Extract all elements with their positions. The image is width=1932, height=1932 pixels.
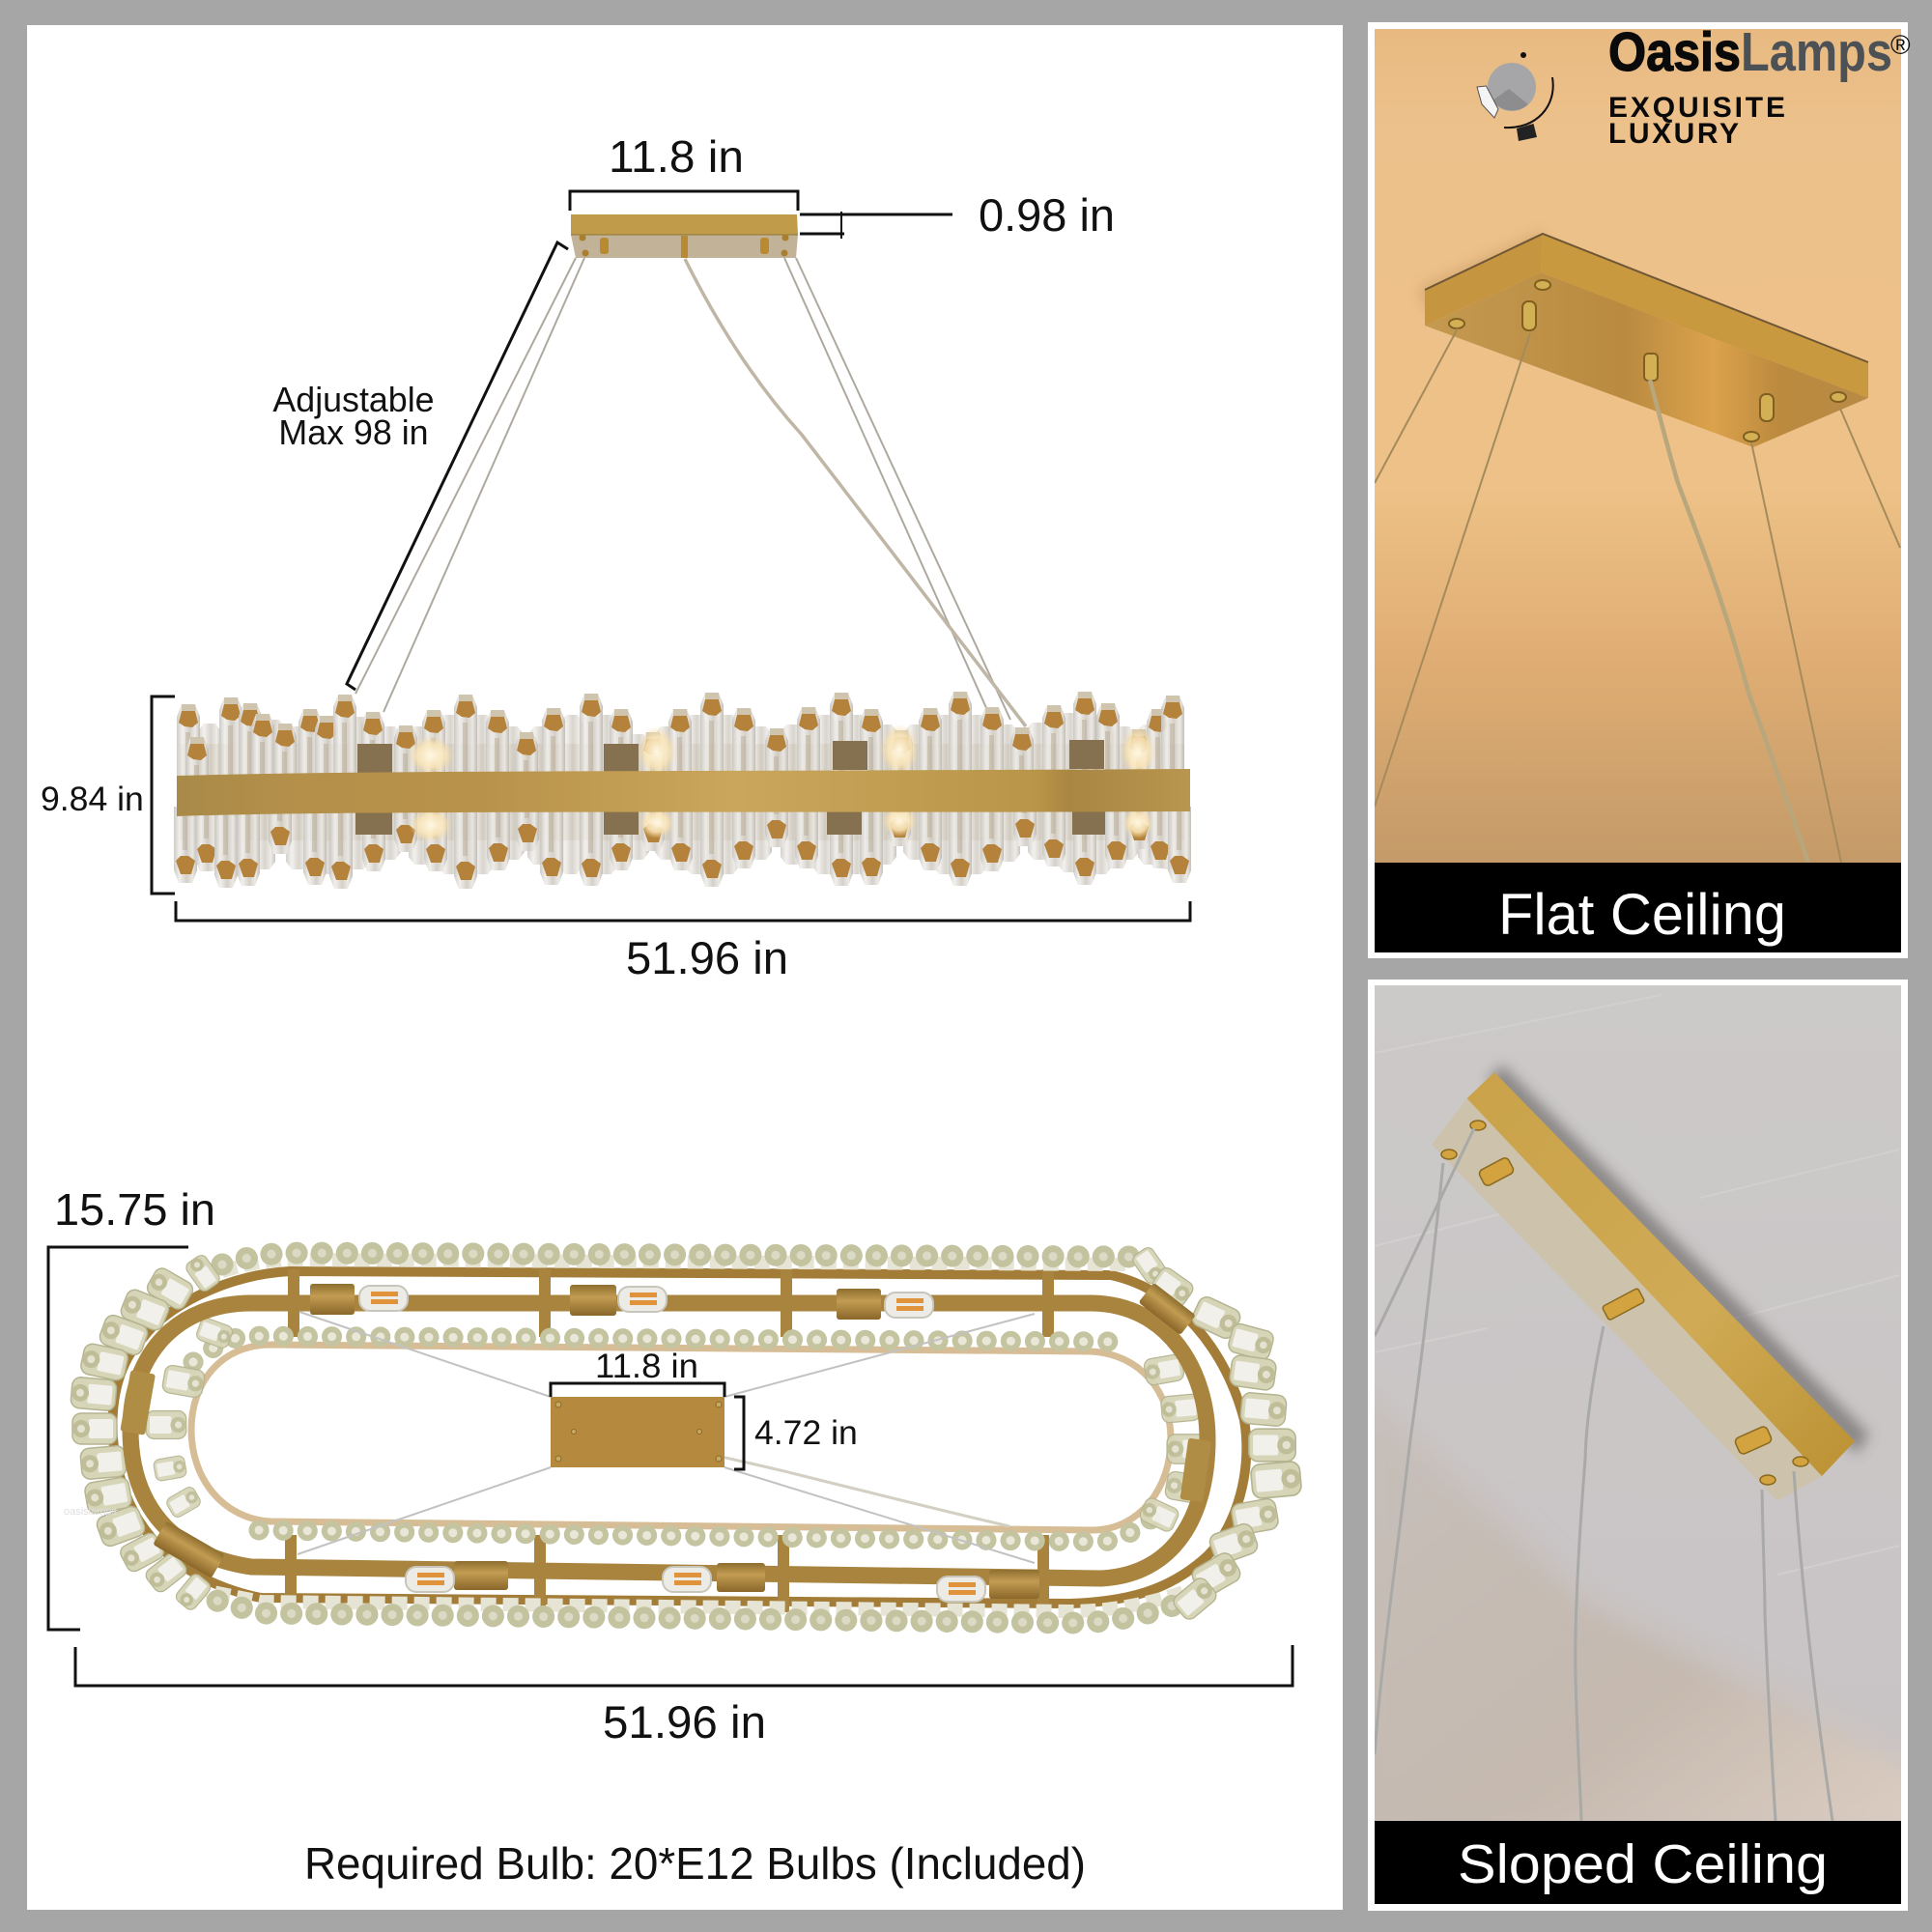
- logo: OasisLamps: LUXURY: [1608, 118, 1739, 150]
- suspension cables: [1375, 1128, 1833, 1821]
- caption: Sloped Ceiling: [1458, 1833, 1828, 1895]
- dimension: plate 4.72 in: [734, 1397, 858, 1469]
- inner ring opening: [191, 1345, 1171, 1530]
- ceiling boards: [1773, 1292, 1900, 1575]
- logo mark: [1477, 52, 1553, 141]
- mounting plate: [1425, 234, 1868, 447]
- dimension: plate height 0.98 in: 0.98 in: [979, 189, 1115, 241]
- suspension cables: [1375, 328, 1900, 863]
- panel background: [27, 25, 1343, 1910]
- dimension: height 9.84 in: 9.84 in: [41, 780, 144, 818]
- suspension wires: [355, 258, 1026, 726]
- wall: [1375, 1409, 1901, 1821]
- panel: sloped ceiling: [1352, 980, 1932, 1911]
- dimension: plate width 11.8 in: 11.8 in: [609, 131, 744, 182]
- dimension: adjustable cable length: Adjustable: [272, 381, 435, 419]
- dimension: side width 51.96 in: 51.96 in: [626, 932, 788, 983]
- dimension: side width 51.96 in: [176, 901, 1190, 983]
- dimension: plate 4.72 in: 4.72 in: [754, 1413, 858, 1452]
- mounting plate: [1432, 1072, 1855, 1501]
- sloped ceiling photo: [1375, 985, 1901, 1821]
- logo: OasisLamps: [1477, 21, 1911, 150]
- lower crystals: [174, 807, 1191, 889]
- right end crystals: [1130, 1245, 1302, 1622]
- wordmark: Oasis: [1608, 21, 1741, 83]
- panel: flat ceiling: [1368, 22, 1908, 958]
- dimension: plate 11.8 in top view: 11.8 in: [595, 1347, 698, 1385]
- logo: OasisLamps: Lamps: [1741, 21, 1892, 83]
- caption bar: [1375, 1821, 1901, 1904]
- dimension: top view width 51.96 in: [75, 1645, 1293, 1747]
- dimension: depth 15.75 in: 15.75 in: [54, 1184, 215, 1235]
- caption: Flat Ceiling: [1498, 882, 1786, 947]
- brass main ring: [130, 1303, 1208, 1578]
- logo: OasisLamps: ®: [1890, 30, 1911, 60]
- outer support ring: [112, 1271, 1246, 1604]
- watermark: oasislamps: [64, 1506, 118, 1518]
- side view ceiling plate: [571, 214, 798, 258]
- plate shadow: [1488, 1065, 1869, 1454]
- panel: dimensions: [27, 25, 1343, 1910]
- dimension: plate 11.8 in top view: [551, 1347, 724, 1397]
- frame: [1368, 980, 1908, 1911]
- tagline: EXQUISITE: [1608, 92, 1785, 124]
- dimension: depth 15.75 in: [48, 1184, 215, 1630]
- plate shadow: [1420, 234, 1540, 305]
- caption bar: [1375, 863, 1901, 952]
- dimension: top view width 51.96 in: 51.96 in: [603, 1696, 766, 1747]
- flat ceiling photo: [1375, 29, 1901, 863]
- inner crystals: [193, 1336, 1155, 1542]
- top view chandelier: [64, 1245, 1302, 1623]
- wires and cord: [298, 1312, 1035, 1563]
- dimension: adjustable cable length: [272, 242, 568, 690]
- sockets and bulbs: [120, 1283, 1211, 1602]
- brass band: [177, 769, 1190, 816]
- side view chandelier: [174, 692, 1191, 889]
- left end crystals: [71, 1253, 222, 1612]
- outer crystals: [193, 1253, 1183, 1623]
- cross bars: [285, 1269, 1054, 1612]
- dimension: height 9.84 in: [41, 696, 175, 894]
- dimension: adjustable cable length: Max 98 in: [278, 413, 429, 452]
- dimension: plate width 11.8 in: [570, 131, 798, 211]
- upper crystals: [177, 692, 1184, 776]
- bulb requirement note: Required Bulb: 20*E12 Bulbs (Included): [304, 1838, 1086, 1889]
- frame: [1368, 22, 1908, 958]
- inner side crystals: [146, 1317, 1209, 1533]
- center plate: [551, 1397, 724, 1467]
